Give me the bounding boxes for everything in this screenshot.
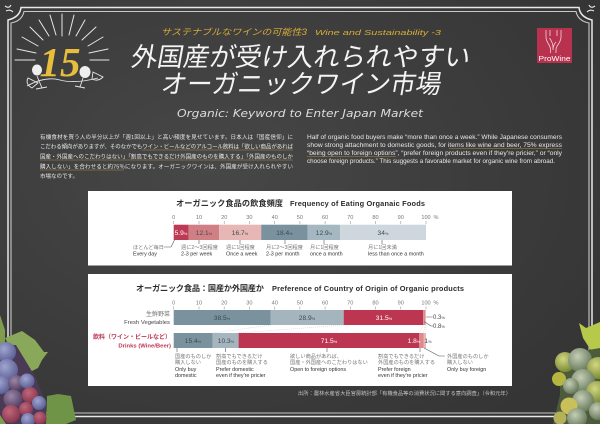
option labels: Open to foreign options <box>290 367 346 373</box>
category labels: 月に1回程度 <box>310 243 339 251</box>
heading <box>176 198 425 208</box>
option labels: 国産のものしか <box>175 352 211 360</box>
axis: 80 <box>372 215 379 221</box>
bar: drinks: 1.8% <box>408 338 421 345</box>
source note: 出所：農林水産省大臣官房統計部「有機食品等の消費状況に関する意向調査」（令和元年） <box>298 389 511 397</box>
axis: 90 <box>398 300 404 306</box>
kicker heading: Wine and Sustainability -3 <box>315 28 442 37</box>
axis <box>172 215 439 224</box>
stacked bar: 12.1% <box>196 230 213 237</box>
Japanese body text <box>40 133 293 180</box>
axis: 30 <box>246 215 253 221</box>
axis: 100 <box>421 300 431 306</box>
category labels: 週に1回程度 <box>226 243 255 251</box>
kicker heading: サステナブルなワインの可能性3 <box>161 27 307 37</box>
title: 外国産が受け入れられやすい <box>129 42 473 72</box>
heading: オーガニック食品：国産か外国産か <box>136 283 265 293</box>
illustration: green grapes <box>552 322 600 424</box>
subtitle: Organic: Keyword to Enter Japan Market <box>177 108 424 120</box>
bar: fresh vegetables <box>174 310 426 325</box>
numeral: 15 <box>40 39 80 85</box>
category labels: ほとんど毎日 <box>133 243 164 251</box>
stacked bar: 5.9% <box>175 230 188 237</box>
axis: 10 <box>196 300 202 306</box>
English body text: choose foreign products.” This suggests a favorable market for organic wine from abroad. <box>307 159 555 165</box>
category labels: 2-3 per week <box>181 252 212 258</box>
rays <box>15 14 109 60</box>
axis: 80 <box>372 300 379 306</box>
option labels: 外国産のものを購入する <box>378 358 435 366</box>
category labels: Once a week <box>226 252 258 258</box>
Japanese body text: 有機食材を買う人の半分以上が「週1回以上」と高い頻度を見せています。日本人は「国産信仰」に <box>40 133 293 141</box>
ribbon and glasses <box>27 72 103 89</box>
stacked bar: 16.7% <box>232 230 249 237</box>
illustration: purple grapes <box>0 315 76 424</box>
category labels: 週に2～3回程度 <box>181 243 218 251</box>
axis: 20 <box>221 215 227 221</box>
English body text: Half of organic food buyers make “more than once a week.” While Japanese consumers <box>307 135 562 141</box>
axis: 90 <box>398 215 404 221</box>
option labels: Only buy foreign <box>447 367 486 373</box>
axis: 0 <box>172 300 175 306</box>
axis: 100 <box>421 215 431 221</box>
row labels: Drinks (Wine/Beer) <box>118 344 171 350</box>
small share callouts: 0.8% <box>433 324 445 330</box>
option labels: domestic <box>175 373 197 379</box>
option labels: Only buy <box>175 367 197 373</box>
axis: % <box>434 215 439 221</box>
Japanese body text: こだわる傾向がありますが、そのなかでもワイン・ビールなどのアルコール飲料は「欲しい商品があれば <box>40 143 293 151</box>
bar: drinks: 1% <box>424 338 432 345</box>
category labels: less than once a month <box>368 252 424 258</box>
category labels: 月に2～3回程度 <box>266 243 303 251</box>
bar: fresh vegetables: 38.5% <box>214 315 231 322</box>
axis: 70 <box>347 300 353 306</box>
row labels: 飲料（ワイン・ビールなど） <box>93 333 171 341</box>
category labels <box>133 240 424 258</box>
heading: Frequency of Eating Organaic Foods <box>290 199 425 208</box>
option labels: 国産のものを購入する <box>216 358 268 366</box>
option labels: 割高でもできるだけ <box>216 352 262 360</box>
badge: 15th issue <box>15 14 109 89</box>
bar: fresh vegetables: 28.9% <box>299 315 316 322</box>
category labels: once a month <box>310 252 343 258</box>
option labels: 国産・外国産へのこだわりはない <box>290 358 368 366</box>
English body text <box>307 135 562 165</box>
axis: 40 <box>272 300 278 306</box>
Japanese body text: 購入しない」を合わせると約75％になります。オーガニックワインは、外国産が受け入れられやすい <box>40 162 293 170</box>
category labels: Every day <box>133 252 157 258</box>
Japanese body text: 市場なのです。 <box>40 172 78 180</box>
category labels: 月に1回未満 <box>368 243 397 251</box>
option labels: even if they're pricier <box>378 373 428 379</box>
bar: drinks: 15.4% <box>185 338 202 345</box>
option labels <box>175 348 489 379</box>
axis: 0 <box>172 215 175 221</box>
bar: drinks <box>174 333 432 348</box>
panel: frequency of eating organic foods <box>88 191 512 266</box>
axis: 40 <box>272 215 278 221</box>
kicker heading <box>161 27 442 37</box>
axis: 50 <box>297 215 303 221</box>
connector lines <box>213 325 426 333</box>
axis: 60 <box>322 300 328 306</box>
axis: 50 <box>297 300 303 306</box>
bar: fresh vegetables: 31.5% <box>376 315 393 322</box>
small share callouts <box>424 315 445 330</box>
row labels: Fresh Vegetables <box>124 320 170 326</box>
axis: % <box>434 300 439 306</box>
stacked bar: 12.9% <box>316 230 333 237</box>
axis: 70 <box>347 215 353 221</box>
option labels: even if they're pricier <box>216 373 266 379</box>
title: オーガニックワイン市場 <box>159 69 444 99</box>
bar: drinks: 71.5% <box>321 338 338 345</box>
stacked bar: 34% <box>378 230 389 237</box>
heading: Preference of Country of Origin of Organic products <box>272 284 464 293</box>
title <box>129 42 473 99</box>
option labels: Prefer foreign <box>378 367 411 373</box>
panel: preference of country of origin <box>88 274 512 386</box>
axis <box>172 300 439 310</box>
option labels: Prefer domestic <box>216 367 254 373</box>
axis: 60 <box>322 215 328 221</box>
stacked bar <box>174 225 426 240</box>
logo: ProWine: ProWine <box>538 54 570 63</box>
category labels: 2-3 per month <box>266 252 300 258</box>
option labels: 欲しい商品があれば、 <box>290 352 342 360</box>
heading: オーガニック食品の飲食頻度 <box>176 198 283 208</box>
axis: 30 <box>246 300 253 306</box>
axis: 20 <box>221 300 227 306</box>
option labels: 割高でもできるだけ <box>378 352 424 360</box>
option labels: 購入しない <box>447 358 473 366</box>
small share callouts: 0.3% <box>433 315 445 321</box>
row labels: 生鮮野菜 <box>146 310 170 318</box>
heading <box>136 283 464 293</box>
axis: 10 <box>196 215 202 221</box>
logo: ProWine <box>537 28 572 63</box>
English body text: show strong attachment to domestic goods, for items like wine and beer, 75% express <box>307 143 562 149</box>
row labels <box>93 310 171 350</box>
bar: drinks: 10.3% <box>218 338 235 345</box>
Japanese body text: 国産・外国産へのこだわりはない」「割高でもできるだけ外国産のものを購入する」「外国産のものしか <box>40 152 293 160</box>
stacked bar: 18.4% <box>276 230 293 237</box>
option labels: 購入しない <box>175 358 201 366</box>
English body text: “being open to foreign options”, “prefer foreign products even if they’re pricier,” or “only <box>307 151 562 157</box>
option labels: 外国産のものしか <box>447 352 489 360</box>
